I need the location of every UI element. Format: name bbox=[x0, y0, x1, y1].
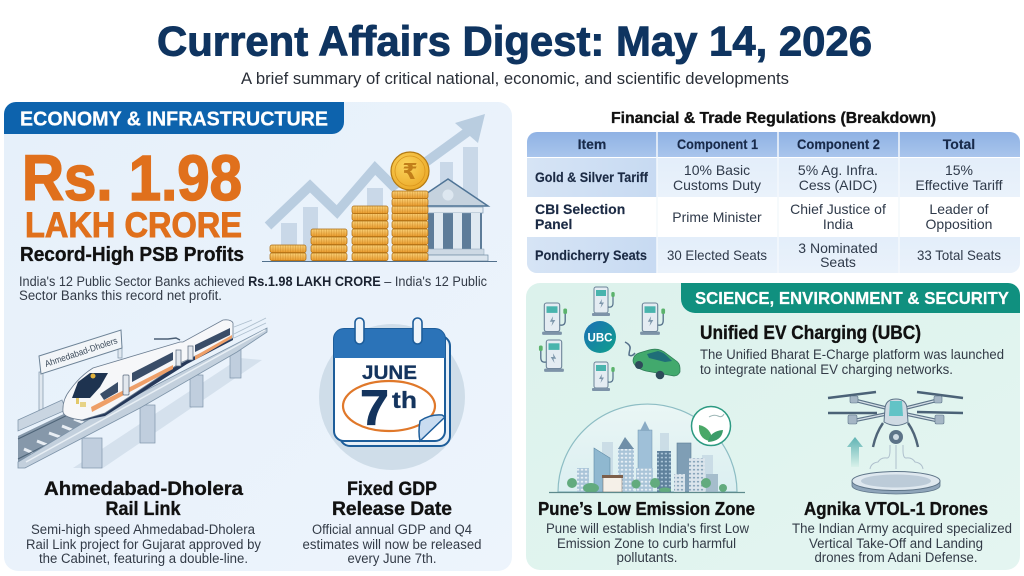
heading: Agnika drones: Agnika VTOL-1 Drones bbox=[804, 499, 988, 519]
section tab: science: SCIENCE, ENVIRONMENT & SECURITY bbox=[695, 288, 1009, 308]
icon: calendar bbox=[319, 318, 465, 470]
table row: gold and silver tariff: 15% bbox=[945, 162, 973, 178]
panel: economy and infrastructure bbox=[4, 102, 512, 571]
big figure: Rs. 1.98 bbox=[22, 142, 242, 214]
icon: bank bbox=[408, 179, 488, 261]
icon: drone body bbox=[828, 392, 963, 447]
table row: gold and silver tariff: Customs Duty bbox=[673, 177, 761, 193]
text: PSB profits description: Sector Banks this record net profit. bbox=[19, 288, 222, 303]
text: Agnika description: The Indian Army acquired specialized bbox=[792, 521, 1012, 536]
heading: PSB profits: Record-High PSB Profits bbox=[20, 243, 244, 266]
heading: GDP date: Release Date bbox=[332, 498, 452, 520]
table row: gold and silver tariff: 10% Basic bbox=[684, 162, 750, 178]
heading: GDP date: Fixed GDP bbox=[347, 478, 437, 500]
speed lines bbox=[234, 318, 266, 338]
text: GDP date description: estimates will now be released bbox=[302, 537, 482, 552]
viaduct pillars bbox=[82, 348, 241, 468]
table row: CBI selection panel: CBI Selection bbox=[535, 201, 625, 217]
panel: science, environment and security bbox=[526, 283, 1020, 570]
train bbox=[63, 320, 233, 421]
illustration: train on viaduct bbox=[18, 318, 267, 468]
calendar text: th: th bbox=[392, 387, 417, 413]
icon: station sign: Ahmedabad-Dholers bbox=[43, 335, 119, 369]
heading: rail link: Ahmedabad-Dholera bbox=[44, 478, 243, 500]
section tab: science bbox=[681, 283, 1020, 313]
table row: Pondicherry seats: 30 Elected Seats bbox=[667, 247, 767, 263]
icon: glass dome bbox=[558, 404, 737, 492]
table row: CBI selection panel: Opposition bbox=[926, 216, 992, 232]
table row: CBI selection panel: Leader of bbox=[929, 201, 989, 217]
table row: gold and silver tariff: Cess (AIDC) bbox=[799, 177, 877, 193]
icon: skyline bbox=[567, 421, 727, 493]
icon: landing pad bbox=[852, 472, 940, 494]
calendar text: June: JUNE bbox=[362, 363, 417, 384]
text: rail link description: the Cabinet, featuring a double-line. bbox=[39, 551, 248, 566]
text: Agnika description: Vertical Take-Off and Landing bbox=[809, 536, 983, 551]
text: GDP date description: Official annual GDP and Q4 bbox=[312, 522, 472, 537]
text: PSB profits description: India's 12 Public Sector Banks achieved Rs.1.98 LAKH CRORE – India's 12 Public bbox=[19, 274, 494, 289]
icon: folded page corner bbox=[419, 415, 445, 441]
table header row bbox=[527, 132, 1020, 157]
text: rail link description: Semi-high speed Ahmedabad-Dholera bbox=[31, 522, 255, 537]
icon: leaf badge bbox=[692, 406, 730, 446]
viaduct shadow bbox=[73, 358, 262, 468]
icon: electric car bbox=[625, 342, 680, 379]
table: financial and trade regulations bbox=[527, 132, 1020, 273]
viaduct deck bbox=[18, 328, 267, 468]
table row: gold and silver tariff: 5% Ag. Infra. bbox=[798, 162, 878, 178]
table row: gold and silver tariff: Gold & Silver Tariff bbox=[535, 169, 648, 185]
table header row: Total bbox=[943, 136, 975, 152]
table row: gold and silver tariff: Effective Tariff bbox=[915, 177, 1003, 193]
table row: CBI selection panel: Panel bbox=[535, 216, 572, 232]
text: Pune description: Pune will establish India's first Low bbox=[546, 521, 749, 536]
text: unified EV charging description: The Unified Bharat E-Charge platform was launched bbox=[700, 347, 1004, 362]
icon: station sign bbox=[39, 330, 122, 410]
table row: Pondicherry seats: Seats bbox=[820, 254, 856, 270]
title: Current Affairs Digest: May 14, 2026 bbox=[157, 18, 872, 64]
icon: growth arrow bbox=[268, 114, 485, 261]
icon: rupee coin: ₹ bbox=[402, 160, 418, 185]
section tab: economy: ECONOMY & INFRASTRUCTURE bbox=[20, 108, 328, 130]
calendar highlight ring bbox=[343, 381, 435, 431]
table row: Pondicherry seats: 3 Nominated bbox=[798, 240, 878, 256]
heading: Pune low emission zone: Pune’s Low Emission Zone bbox=[538, 499, 755, 519]
subtitle: A brief summary of critical national, economic, and scientific developments bbox=[241, 70, 789, 88]
table row: Pondicherry seats: Pondicherry Seats bbox=[535, 247, 647, 263]
icon: UBC badge bbox=[584, 321, 616, 353]
calendar text: 7: 7 bbox=[360, 380, 389, 436]
icon: coin stacks bbox=[270, 191, 428, 261]
heading: rail link: Rail Link bbox=[106, 498, 181, 520]
viaduct rear barrier bbox=[18, 400, 66, 431]
big figure unit: LAKH CRORE bbox=[25, 206, 242, 245]
icon: VTOL drone bbox=[828, 392, 963, 494]
table row: CBI selection panel: India bbox=[823, 216, 853, 232]
text: Pune description: pollutants. bbox=[616, 550, 678, 565]
icon: up arrow bbox=[847, 437, 863, 467]
icon: chargers bbox=[539, 287, 665, 391]
table row: CBI selection panel: Chief Justice of bbox=[790, 201, 886, 217]
icon: city in low emission dome bbox=[549, 404, 745, 493]
text: GDP date description: every June 7th. bbox=[348, 551, 436, 566]
text: Pune description: Emission Zone to curb harmful bbox=[557, 536, 736, 551]
table heading: Financial & Trade Regulations (Breakdown) bbox=[611, 110, 936, 127]
icon: EV charging network bbox=[539, 287, 680, 391]
section tab: economy bbox=[4, 102, 344, 134]
table row: CBI selection panel: Prime Minister bbox=[672, 209, 762, 225]
table row: CBI selection panel bbox=[527, 198, 1020, 236]
table row: Pondicherry seats: 33 Total Seats bbox=[917, 247, 1001, 263]
icon: UBC badge: UBC bbox=[588, 332, 612, 344]
heading: unified EV charging: Unified EV Charging (UBC) bbox=[700, 323, 921, 344]
text: rail link description: Rail Link project for Gujarat approved by bbox=[26, 537, 261, 552]
table row: Pondicherry seats bbox=[527, 237, 1020, 273]
table header row: Item bbox=[578, 136, 606, 152]
table row: gold and silver tariff bbox=[527, 158, 1020, 197]
icon: downwash lines bbox=[870, 445, 923, 469]
text: Agnika description: drones from Adani Defense. bbox=[814, 550, 978, 565]
text: unified EV charging description: to integrate national EV charging networks. bbox=[700, 362, 953, 377]
chart icon: rising coins, arrow and bank bbox=[262, 114, 497, 262]
table header row: Component 1 bbox=[677, 136, 758, 152]
table header row: Component 2 bbox=[797, 136, 880, 152]
icon: rupee coin bbox=[391, 152, 429, 190]
rail track bbox=[18, 410, 110, 463]
